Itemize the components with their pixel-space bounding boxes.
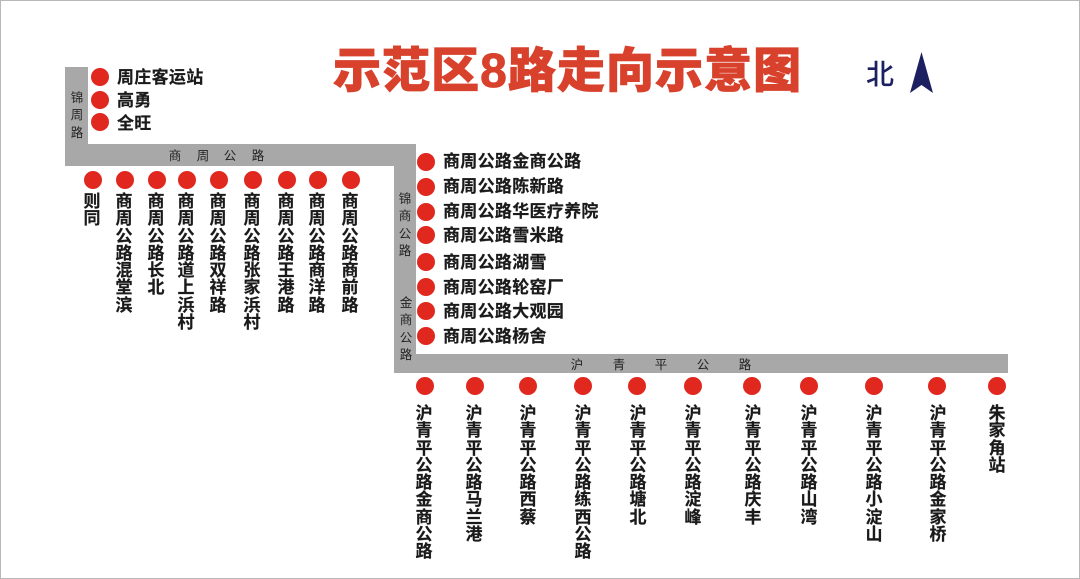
- stop: 沪青平公路庆丰: 路: [744, 473, 762, 492]
- stop: 商周公路金商公路: 商周公路金商公路: [443, 152, 581, 171]
- road label: 金商公路: 路: [400, 348, 412, 362]
- stop: 沪青平公路山湾: 湾: [800, 508, 818, 527]
- stop: 沪青平公路马兰港: 公: [466, 456, 482, 475]
- road label: 锦商公路: 商: [399, 209, 411, 223]
- stop: 商周公路混堂滨: 商: [116, 192, 132, 211]
- stop: 商周公路商洋路: 公: [308, 227, 326, 246]
- stop: 沪青平公路马兰港: 港: [466, 525, 482, 544]
- stop: 商周公路双祥路: 商: [210, 192, 226, 211]
- stop: 商周公路混堂滨: 滨: [116, 296, 132, 315]
- stop: 商周公路华医疗养院: 商周公路华医疗养院: [443, 202, 599, 221]
- stop: 商周公路商前路: 路: [342, 296, 358, 315]
- stop: 全旺: 全旺: [117, 114, 152, 133]
- stop: 沪青平公路西蔡: [519, 377, 537, 527]
- road label: 商周公路: 公: [224, 149, 236, 163]
- stop: 沪青平公路塘北: 路: [630, 473, 646, 492]
- stop: 商周公路王港路: 商: [278, 192, 294, 211]
- road label: 锦商公路: [399, 192, 411, 258]
- stop: 沪青平公路金家桥: 沪: [930, 404, 946, 423]
- stop: 沪青平公路塘北: 北: [630, 508, 646, 527]
- stop: 高勇: 高勇: [117, 91, 152, 110]
- road label: 锦周路: 路: [71, 126, 83, 140]
- road label: 沪青平公路: 沪: [571, 358, 583, 372]
- stop: 沪青平公路马兰港: 青: [466, 421, 482, 440]
- stop: 沪青平公路小淀山: 淀: [866, 508, 882, 527]
- stop: 沪青平公路淀峰: 青: [684, 421, 702, 440]
- stop: 沪青平公路练西公路: 练: [574, 490, 592, 509]
- stop: 商周公路王港路: 路: [278, 244, 294, 263]
- stop: 沪青平公路金家桥: 青: [930, 421, 946, 440]
- stop: 商周公路张家浜村: 村: [244, 313, 260, 332]
- stop: 商周公路商洋路: [308, 171, 327, 315]
- stop: 商周公路双祥路: 双: [210, 261, 226, 280]
- stop: 沪青平公路练西公路: 路: [574, 473, 592, 492]
- stop: 沪青平公路西蔡: 蔡: [520, 508, 536, 527]
- stop: 商周公路雪米路: 商周公路雪米路: [443, 226, 564, 245]
- stop: 沪青平公路马兰港: [466, 377, 484, 544]
- road label: 金商公路: 商: [400, 313, 412, 327]
- road label: 商周公路: 周: [197, 149, 209, 163]
- stop: 高勇: [91, 91, 152, 110]
- road label: 沪青平公路: [571, 358, 751, 372]
- stop: 商周公路陈新路: 商周公路陈新路: [443, 177, 564, 196]
- road label: 锦周路: [71, 91, 83, 140]
- stop: 商周公路张家浜村: 家: [244, 278, 260, 297]
- north label: 北: [866, 59, 894, 90]
- stop: 沪青平公路西蔡: 沪: [520, 404, 536, 423]
- stop: 沪青平公路金家桥: [928, 377, 946, 544]
- stop: 沪青平公路淀峰: 沪: [684, 404, 702, 423]
- stop: 则同: 同: [84, 209, 100, 228]
- stop: 商周公路商洋路: 商: [308, 261, 326, 280]
- stop: 周庄客运站: 周庄客运站: [117, 68, 204, 87]
- stop: 商周公路张家浜村: 路: [244, 244, 260, 263]
- stop: 沪青平公路小淀山: [865, 377, 883, 544]
- road label: 锦商公路: 路: [399, 244, 411, 258]
- stop: 沪青平公路小淀山: 沪: [866, 404, 882, 423]
- stop: 商周公路轮窑厂: 商周公路轮窑厂: [443, 278, 564, 297]
- title: 示范区8路走向示意图: [333, 45, 802, 98]
- stop: 商周公路商前路: 商: [342, 261, 358, 280]
- stop: 沪青平公路金商公路: [416, 377, 434, 561]
- stop: 商周公路双祥路: 路: [210, 296, 226, 315]
- stop: 沪青平公路山湾: 山: [800, 490, 818, 509]
- stop: 沪青平公路塘北: 塘: [630, 490, 646, 509]
- stop: 沪青平公路淀峰: 峰: [684, 508, 702, 527]
- stop: 商周公路商洋路: 周: [308, 209, 326, 228]
- stop: 商周公路商前路: 商: [342, 192, 358, 211]
- stop: 沪青平公路淀峰: 平: [684, 439, 702, 458]
- stop: 商周公路王港路: [278, 171, 296, 315]
- stop: 朱家角站: 角: [988, 439, 1006, 458]
- stop: 沪青平公路金商公路: 路: [416, 542, 432, 561]
- stop: 沪青平公路金商公路: 平: [416, 439, 432, 458]
- stop: 全旺: [91, 113, 152, 133]
- stop: 商周公路双祥路: 公: [210, 227, 226, 246]
- stop: 商周公路道上浜村: 路: [178, 244, 194, 263]
- stop: 商周公路道上浜村: 周: [178, 209, 194, 228]
- stop: 朱家角站: 家: [988, 421, 1006, 440]
- stop: 商周公路道上浜村: [178, 171, 196, 332]
- stop: 沪青平公路金家桥: 路: [930, 473, 946, 492]
- stop: 商周公路双祥路: 祥: [210, 278, 226, 297]
- stop: 沪青平公路金商公路: 公: [416, 525, 432, 544]
- stop: 沪青平公路庆丰: [743, 377, 762, 527]
- stop: 沪青平公路淀峰: 路: [684, 473, 702, 492]
- stop: 商周公路王港路: 王: [278, 261, 294, 280]
- stop: 沪青平公路练西公路: 平: [574, 439, 592, 458]
- stop: 沪青平公路马兰港: 路: [466, 473, 482, 492]
- road label: 金商公路: 公: [400, 331, 412, 345]
- stop: 则同: [84, 171, 102, 228]
- stop: 沪青平公路塘北: 青: [630, 421, 646, 440]
- stop: 商周公路湖雪: 商周公路湖雪: [443, 253, 547, 272]
- stop: 沪青平公路塘北: [628, 377, 646, 527]
- stop: 沪青平公路金家桥: 金: [930, 490, 946, 509]
- stop: 沪青平公路塘北: 平: [630, 439, 646, 458]
- road label: 锦周路: 锦: [71, 91, 83, 105]
- stop: 商周公路道上浜村: 商: [178, 192, 194, 211]
- stop: 沪青平公路练西公路: 沪: [574, 404, 592, 423]
- stop: 沪青平公路淀峰: 公: [684, 456, 702, 475]
- stop: 商周公路混堂滨: 公: [116, 227, 132, 246]
- stop: 沪青平公路金家桥: 家: [930, 508, 946, 527]
- stop: 商周公路混堂滨: 堂: [116, 278, 132, 297]
- stop: 沪青平公路金家桥: 平: [930, 439, 946, 458]
- stop: 沪青平公路淀峰: [684, 377, 702, 527]
- stop: 商周公路双祥路: 周: [210, 209, 226, 228]
- stop: 沪青平公路小淀山: 小: [866, 490, 882, 509]
- stop: 朱家角站: 站: [988, 456, 1006, 475]
- stop: 商周公路长北: 长: [148, 261, 164, 280]
- stop: 商周公路张家浜村: 浜: [244, 296, 260, 315]
- stop: 商周公路混堂滨: 混: [116, 261, 132, 280]
- stop: 沪青平公路西蔡: 青: [520, 421, 536, 440]
- stop: 沪青平公路小淀山: 路: [866, 473, 882, 492]
- stop: 商周公路混堂滨: 路: [116, 244, 132, 263]
- road label: 商周公路: 商: [169, 149, 181, 163]
- stop: 沪青平公路小淀山: 青: [866, 421, 882, 440]
- stop: 沪青平公路练西公路: [574, 377, 592, 561]
- stop: 商周公路张家浜村: 公: [244, 227, 260, 246]
- stop: 沪青平公路练西公路: 路: [574, 542, 592, 561]
- stop: 沪青平公路马兰港: 兰: [466, 508, 482, 527]
- stop: 沪青平公路庆丰: 平: [744, 439, 762, 458]
- road label: 锦商公路: 公: [399, 227, 411, 241]
- stop: 沪青平公路庆丰: 丰: [744, 508, 762, 527]
- stop: 商周公路混堂滨: 周: [116, 209, 132, 228]
- stop: 商周公路双祥路: [210, 171, 228, 315]
- stop: 商周公路双祥路: 路: [210, 244, 226, 263]
- stop: 沪青平公路练西公路: 青: [574, 421, 592, 440]
- stop: 商周公路道上浜村: 道: [178, 261, 194, 280]
- road label: 锦商公路: 锦: [399, 192, 411, 206]
- stop: 商周公路商前路: [342, 171, 360, 315]
- stop: 商周公路长北: 路: [148, 244, 164, 263]
- stop: 商周公路商洋路: 商: [308, 192, 326, 211]
- stop: 商周公路张家浜村: [244, 171, 262, 332]
- stop: 朱家角站: 朱: [988, 404, 1006, 423]
- stop: 沪青平公路金商公路: 金: [416, 490, 432, 509]
- stop: 沪青平公路山湾: 青: [800, 421, 818, 440]
- stop: 沪青平公路小淀山: 公: [866, 456, 882, 475]
- road label: 沪青平公路: 路: [739, 358, 751, 372]
- stop: 沪青平公路小淀山: 平: [866, 439, 882, 458]
- stop: 沪青平公路山湾: [800, 377, 818, 527]
- road label: 沪青平公路: 平: [655, 358, 667, 372]
- stop: 商周公路商洋路: 路: [308, 296, 326, 315]
- stop: 则同: 则: [84, 192, 100, 211]
- stop: 商周公路张家浜村: 商: [244, 192, 260, 211]
- stop: 商周公路商洋路: 路: [308, 244, 326, 263]
- stop: 沪青平公路山湾: 路: [800, 473, 818, 492]
- stop: 沪青平公路西蔡: 平: [520, 439, 536, 458]
- stop: 沪青平公路金商公路: 公: [416, 456, 432, 475]
- stop: 商周公路商前路: 公: [342, 227, 358, 246]
- stop: 沪青平公路马兰港: 沪: [466, 404, 482, 423]
- stop: 商周公路长北: 北: [148, 278, 164, 297]
- stop: 沪青平公路庆丰: 公: [744, 456, 762, 475]
- stop: 商周公路商前路: 路: [342, 244, 358, 263]
- stop: 沪青平公路金商公路: 沪: [416, 404, 432, 423]
- stop: 商周公路商前路: 前: [342, 278, 358, 297]
- stop: 商周公路张家浜村: 张: [244, 261, 260, 280]
- road label: 金商公路: 金: [400, 296, 412, 310]
- stop: 沪青平公路金商公路: 商: [416, 508, 432, 527]
- stop: 沪青平公路金家桥: 桥: [930, 525, 946, 544]
- stop: 商周公路王港路: 公: [278, 227, 294, 246]
- stop: 商周公路道上浜村: 上: [178, 278, 194, 297]
- road label: 商周公路: [169, 149, 264, 163]
- stop: 沪青平公路塘北: 沪: [630, 404, 646, 423]
- stop: 沪青平公路西蔡: 西: [520, 490, 536, 509]
- road label: 沪青平公路: 公: [697, 358, 709, 372]
- stop: 沪青平公路小淀山: 山: [866, 525, 882, 544]
- stop: 沪青平公路淀峰: 淀: [684, 490, 702, 509]
- stop: 商周公路张家浜村: 周: [244, 209, 260, 228]
- stop: 商周公路王港路: 路: [278, 296, 294, 315]
- stop: 沪青平公路练西公路: 西: [574, 508, 592, 527]
- road label: 金商公路: [400, 296, 412, 362]
- stop: 商周公路长北: [148, 171, 166, 297]
- stop: 商周公路商前路: 周: [342, 209, 358, 228]
- stop: 商周公路混堂滨: [116, 171, 134, 315]
- stop: 商周公路杨舍: 商周公路杨舍: [443, 327, 547, 346]
- stop: 商周公路长北: 商: [148, 192, 164, 211]
- stop: 沪青平公路马兰港: 马: [466, 490, 482, 509]
- stop: 商周公路长北: 公: [148, 227, 164, 246]
- stop: 沪青平公路西蔡: 路: [520, 473, 536, 492]
- road label: 沪青平公路: 青: [613, 358, 625, 372]
- stop: 商周公路王港路: 港: [278, 278, 294, 297]
- stop: 沪青平公路金商公路: 青: [416, 421, 432, 440]
- stop: 商周公路道上浜村: 浜: [178, 296, 194, 315]
- stop: 沪青平公路山湾: 沪: [800, 404, 818, 423]
- stop: 沪青平公路金商公路: 路: [416, 473, 432, 492]
- stop: 商周公路王港路: 周: [278, 209, 294, 228]
- road label: 商周公路: 路: [252, 149, 264, 163]
- icon: north arrow: [910, 52, 933, 93]
- stop: 沪青平公路金家桥: 公: [930, 456, 946, 475]
- stop: 朱家角站: [988, 377, 1006, 475]
- stop: 商周公路大观园: 商周公路大观园: [443, 302, 564, 321]
- road label: 锦周路: 周: [71, 108, 83, 122]
- stop: 沪青平公路练西公路: 公: [574, 456, 592, 475]
- stop: 沪青平公路庆丰: 青: [744, 421, 762, 440]
- stop: 沪青平公路西蔡: 公: [520, 456, 536, 475]
- stop: 沪青平公路山湾: 平: [800, 439, 818, 458]
- stop: 商周公路道上浜村: 公: [178, 227, 194, 246]
- stop: 沪青平公路庆丰: 沪: [744, 404, 762, 423]
- stop: 沪青平公路练西公路: 公: [574, 525, 592, 544]
- stop: 商周公路商洋路: 洋: [308, 278, 326, 297]
- stop: 商周公路长北: 周: [148, 209, 164, 228]
- stop: 沪青平公路山湾: 公: [800, 456, 818, 475]
- stop: 沪青平公路塘北: 公: [630, 456, 646, 475]
- stop: 沪青平公路庆丰: 庆: [744, 490, 762, 509]
- stop: 商周公路道上浜村: 村: [178, 313, 194, 332]
- stop: 沪青平公路马兰港: 平: [466, 439, 482, 458]
